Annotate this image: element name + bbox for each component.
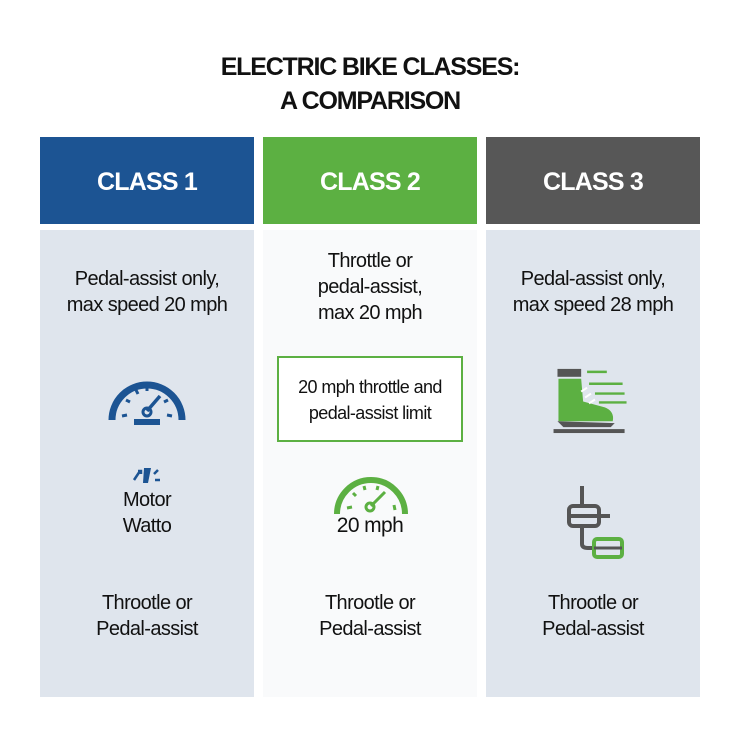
text: throttle or pedal-assist: Throotle or [102, 592, 192, 614]
text: throttle or pedal-assist [542, 592, 644, 640]
text: throttle or pedal-assist [319, 592, 422, 640]
icon: green speedometer [334, 477, 408, 514]
panel: class 3 body [486, 230, 700, 697]
text: class 2 description: max 20 mph [318, 302, 422, 324]
callout: limit box: 20 mph throttle and [298, 377, 442, 397]
icon: motor spark [133, 468, 160, 483]
text: class 1 description: max speed 20 mph [67, 294, 227, 316]
title: A COMPARISON [280, 87, 460, 115]
panel: class 2 header: CLASS 2 [320, 168, 420, 196]
panel: class 1 header [40, 137, 254, 224]
text: throttle or pedal-assist: Pedal-assist [542, 618, 644, 640]
text: throttle or pedal-assist: Throotle or [325, 592, 415, 614]
icon: pedal [567, 486, 624, 559]
text: class 3 description [513, 268, 673, 316]
callout: limit box: pedal-assist limit [309, 403, 431, 423]
panel: class 2 body [263, 230, 477, 697]
text: 20 mph: 20 mph [337, 514, 403, 537]
text: class 1 description: Pedal-assist only, [75, 268, 219, 290]
text: motor watts [122, 489, 172, 537]
panel: class 3 header [486, 137, 700, 224]
title [221, 53, 519, 115]
text: class 2 description [318, 250, 422, 324]
panel: class 2 header [263, 137, 477, 224]
panel: class 1 body [40, 230, 254, 697]
icon: shoe with speed lines [554, 368, 627, 434]
text: class 2 description: pedal-assist, [318, 276, 422, 298]
text: motor watts: Watto [123, 515, 171, 537]
callout: limit box [277, 356, 463, 442]
title: ELECTRIC BIKE CLASSES: [221, 53, 519, 81]
text: motor watts: Motor [123, 489, 171, 511]
text: class 3 description: Pedal-assist only, [521, 268, 665, 290]
text: class 1 description [67, 268, 227, 316]
text: class 2 description: Throttle or [328, 250, 412, 272]
text: throttle or pedal-assist [96, 592, 198, 640]
icon: blue speedometer [108, 382, 186, 425]
text: throttle or pedal-assist: Throotle or [548, 592, 638, 614]
panel: class 3 header: CLASS 3 [543, 168, 643, 196]
text: class 3 description: max speed 28 mph [513, 294, 673, 316]
text: throttle or pedal-assist: Pedal-assist [319, 618, 421, 640]
text: throttle or pedal-assist: Pedal-assist [96, 618, 198, 640]
panel: class 1 header: CLASS 1 [97, 168, 197, 196]
